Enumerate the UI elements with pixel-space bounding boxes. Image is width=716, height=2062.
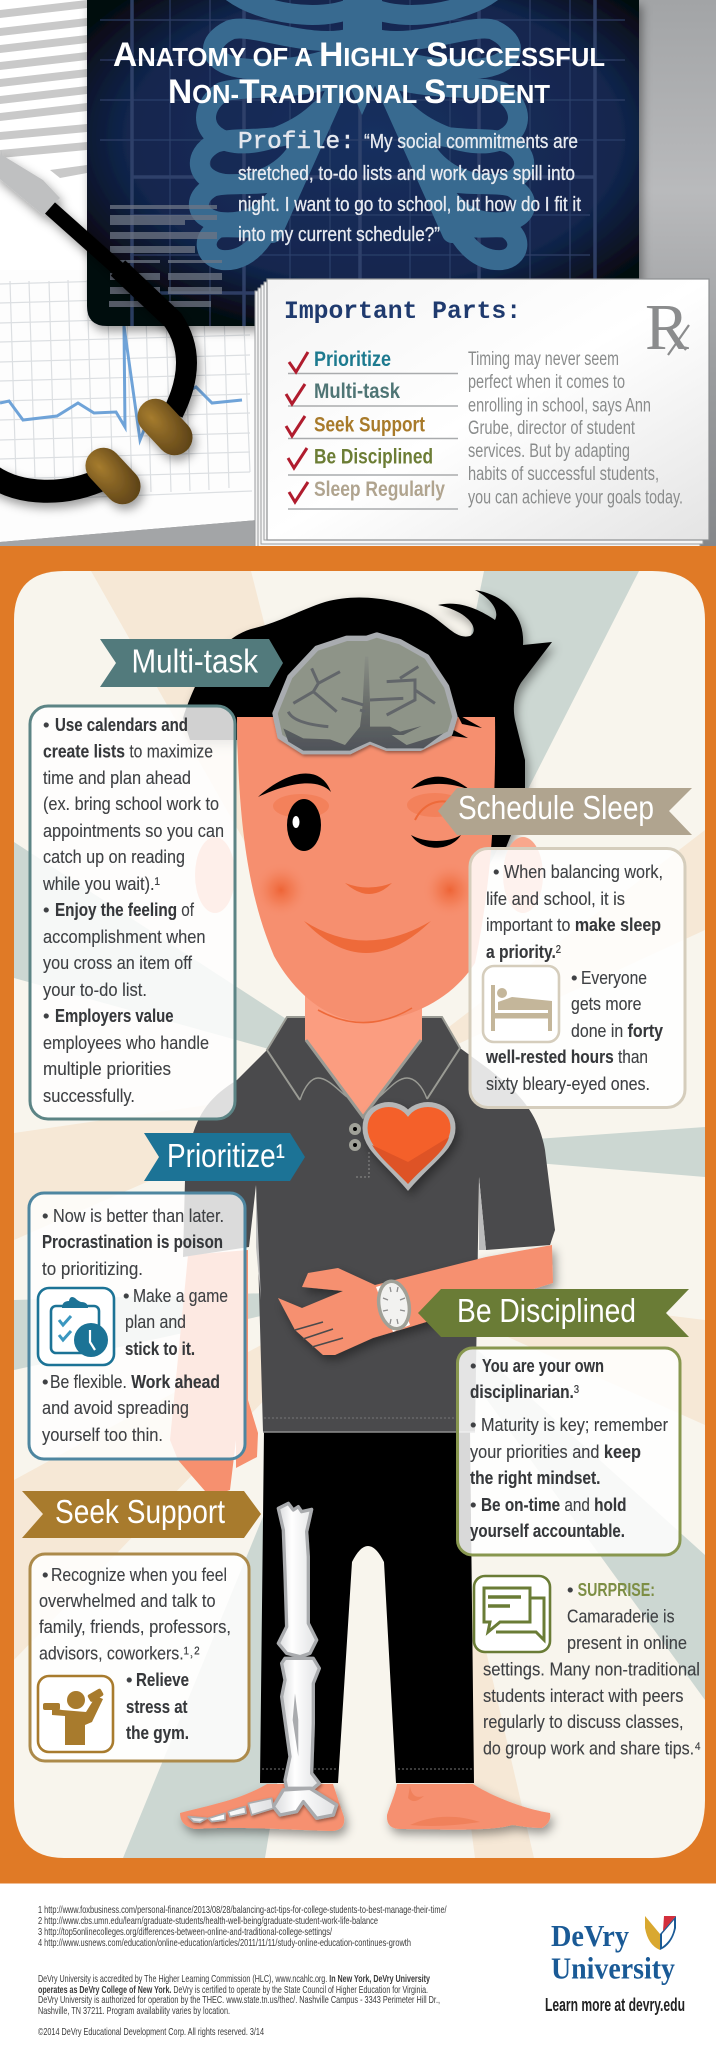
callout: discipline tips xyxy=(458,1348,680,1555)
intro paragraph xyxy=(468,349,683,509)
banner: prioritize: Prioritize¹ xyxy=(167,1137,285,1174)
accreditation statement: Nashville, TN 37211. Program availability varies by location. xyxy=(38,2005,230,2017)
heart xyxy=(365,1105,453,1187)
checklist: Prioritize xyxy=(314,348,391,371)
icon: clipboard and clock xyxy=(38,1288,114,1365)
callout: discipline tips: your priorities and keep xyxy=(470,1441,641,1462)
callout: sleep tips: a priority.² xyxy=(486,941,561,962)
profile quote: “My social commitments are xyxy=(364,131,578,153)
footnote sources: 4 http://www.usnews.com/education/online-education/articles/2011/11/11/study-online-education-continues-growth xyxy=(38,1937,411,1949)
legs and trousers xyxy=(260,1430,474,1783)
panel: important parts prescription pad xyxy=(255,279,709,553)
callout: prioritize tips: and avoid spreading xyxy=(42,1397,189,1418)
footer xyxy=(0,1884,716,2062)
callout: multi-task tips: (ex. bring school work to xyxy=(43,793,219,814)
profile quote: into my current schedule?” xyxy=(238,224,440,246)
student figure xyxy=(170,590,555,1831)
callout: discipline tips: Be on-time and hold xyxy=(481,1494,626,1515)
icon: speech bubbles xyxy=(474,1576,550,1652)
neck xyxy=(305,985,422,1117)
panel: be disciplined xyxy=(418,1289,689,1555)
callout: prioritize tips: • xyxy=(123,1285,129,1306)
callout: prioritize tips: stick to it. xyxy=(125,1338,195,1359)
nose and mouth xyxy=(345,883,392,894)
callout: discipline tips: disciplinarian.³ xyxy=(470,1381,579,1402)
callout: prioritize tips xyxy=(29,1193,245,1459)
ECG paper xyxy=(0,270,258,546)
checklist: Multi-task xyxy=(314,380,400,403)
shirt buttons xyxy=(351,1125,359,1149)
callout: sleep tips: important to make sleep xyxy=(486,914,661,935)
callout: multi-task tips: catch up on reading xyxy=(43,846,185,867)
cheeks xyxy=(253,862,309,918)
intro paragraph: Grube, director of student xyxy=(468,418,636,439)
panel: seek support xyxy=(22,1491,261,1761)
callout: support tips: Recognize when you feel xyxy=(51,1564,227,1585)
logo: DeVry University: University xyxy=(551,1950,675,1986)
profile quote xyxy=(238,129,581,246)
icon: person lifting weights xyxy=(38,1676,113,1752)
x-ray film xyxy=(87,0,639,326)
arm and hand xyxy=(278,1245,553,1355)
callout: support tips: the gym. xyxy=(126,1722,189,1743)
title: NON-TRADITIONAL STUDENT xyxy=(168,73,550,111)
banner: multi-task: Multi-task xyxy=(132,642,258,680)
panel: surprise: SURPRISE: xyxy=(578,1579,655,1600)
callout: prioritize tips: Procrastination is poison xyxy=(42,1231,223,1252)
panel: surprise: • xyxy=(567,1579,573,1600)
panel: surprise: students interact with peers xyxy=(483,1685,684,1706)
callout: multi-task tips: Enjoy the feeling of xyxy=(55,899,195,920)
footnote sources: 1 http://www.foxbusiness.com/personal-finance/2013/08/28/balancing-act-tips-for-college-students-to-best-manage-their-time/ xyxy=(38,1904,447,1916)
callout: multi-task tips: time and plan ahead xyxy=(43,767,191,788)
callout: support tips: stress at xyxy=(126,1696,188,1717)
callout: multi-task tips xyxy=(30,706,235,1119)
footnote sources: 2 http://www.cbs.umn.edu/learn/graduate-students/health-well-being/graduate-student-work-life-balance xyxy=(38,1915,378,1927)
callout: multi-task tips: • xyxy=(43,899,49,920)
callout: prioritize tips: to prioritizing. xyxy=(42,1258,143,1279)
callout: discipline tips: • xyxy=(470,1355,476,1376)
brain xyxy=(275,635,455,752)
title xyxy=(113,36,605,111)
callout: discipline tips: the right mindset. xyxy=(470,1467,600,1488)
icon: Rx symbol: R xyxy=(645,291,689,364)
intro paragraph: perfect when it comes to xyxy=(468,372,625,393)
callout: sleep tips: Everyone xyxy=(581,967,647,988)
panel: surprise: present in online xyxy=(567,1632,687,1653)
callout: sleep tips: well-rested hours than xyxy=(485,1046,648,1067)
banner: seek support xyxy=(22,1491,261,1538)
callout: multi-task tips: successfully. xyxy=(43,1085,135,1106)
callout: discipline tips: You are your own xyxy=(482,1355,604,1376)
shirt xyxy=(183,1017,555,1432)
banner: be disciplined xyxy=(418,1289,689,1337)
callout: prioritize tips: • xyxy=(42,1371,48,1392)
accreditation statement: operates as DeVry College of New York. DeVry is certified to operate by the State Council of Higher Education for Virginia. xyxy=(38,1984,428,1996)
callout: support tips: • xyxy=(42,1564,48,1585)
title: ANATOMY OF A HIGHLY SUCCESSFUL xyxy=(113,36,605,74)
banner: be disciplined: Be Disciplined xyxy=(457,1292,636,1329)
callout: multi-task tips: your to-do list. xyxy=(43,979,147,1000)
panel: surprise: Camaraderie is xyxy=(567,1606,674,1626)
callout: multi-task tips: while you wait).¹ xyxy=(42,873,160,894)
profile quote: night. I want to go to school, but how do I fit it xyxy=(238,194,581,216)
skeleton leg xyxy=(188,1503,337,1822)
panel: prioritize xyxy=(29,1133,305,1459)
earpieces xyxy=(78,391,200,512)
callout: prioritize tips: yourself too thin. xyxy=(42,1424,163,1445)
callout: support tips: • xyxy=(126,1669,132,1690)
callout: multi-task tips: you cross an item off xyxy=(43,952,193,973)
panel: schedule sleep xyxy=(438,788,692,1108)
panel background with rays xyxy=(14,571,705,1858)
callout: multi-task tips: multiple priorities xyxy=(43,1058,171,1079)
callout: support tips xyxy=(30,1554,249,1761)
accreditation statement: DeVry University is authorized for operation by the THEC. www.state.tn.us/thec/. Nashville Campus - 3343 Perimeter Hill Dr., xyxy=(38,1994,440,2006)
left arm xyxy=(170,1250,258,1491)
stethoscope xyxy=(0,150,200,512)
orange frame xyxy=(0,546,716,1884)
checklist: Seek Support xyxy=(314,414,425,436)
callout: discipline tips: Maturity is key; remember xyxy=(481,1414,668,1435)
header background xyxy=(0,0,716,546)
accreditation statement: DeVry University is accredited by The Higher Learning Commission (HLC), www.ncahlc.org. In New York, DeVry University xyxy=(38,1973,430,1985)
callout: sleep tips: • xyxy=(571,967,577,988)
ears xyxy=(195,837,543,913)
profile quote: stretched, to-do lists and work days spill into xyxy=(238,163,575,185)
accreditation statement xyxy=(38,1973,440,2038)
icon: bed xyxy=(483,966,559,1042)
banner: schedule sleep: Schedule Sleep xyxy=(458,789,654,826)
callout: sleep tips xyxy=(470,848,685,1108)
callout: multi-task tips: Use calendars and xyxy=(55,714,188,735)
intro paragraph: enrolling in school, says Ann xyxy=(468,396,651,416)
heading: important parts: Important Parts: xyxy=(284,298,521,326)
checklist xyxy=(286,348,458,509)
panel: surprise: regularly to discuss classes, xyxy=(483,1711,684,1732)
callout: sleep tips: done in forty xyxy=(571,1020,664,1041)
callout: multi-task tips: accomplishment when xyxy=(43,926,206,947)
wristwatch xyxy=(375,1279,413,1332)
callout: multi-task tips: Employers value xyxy=(55,1005,174,1026)
callout: discipline tips: • xyxy=(470,1494,476,1515)
callout: support tips: overwhelmed and talk to xyxy=(39,1590,216,1611)
callout: multi-task tips: • xyxy=(43,714,49,735)
callout: discipline tips: • xyxy=(470,1414,476,1435)
callout: multi-task tips: employees who handle xyxy=(43,1032,209,1053)
callout: multi-task tips: appointments so you can xyxy=(43,820,224,841)
eyes and brows xyxy=(258,773,470,851)
intro paragraph: services. But by adapting xyxy=(468,441,630,462)
feet xyxy=(180,1784,550,1831)
checklist: Sleep Regularly xyxy=(314,478,445,501)
callout: support tips: Relieve xyxy=(136,1669,189,1690)
callout: sleep tips: sixty bleary-eyed ones. xyxy=(486,1073,650,1094)
callout: prioritize tips: Be flexible. Work ahead xyxy=(50,1371,220,1392)
panel: multi-task xyxy=(30,639,283,1119)
callout: discipline tips: yourself accountable. xyxy=(470,1520,625,1541)
footnote sources xyxy=(38,1904,447,1949)
callout: sleep tips: • xyxy=(493,861,499,882)
callout: support tips: family, friends, professors, xyxy=(39,1616,231,1637)
intro paragraph: habits of successful students, xyxy=(468,464,659,485)
callout: multi-task tips: create lists to maximize xyxy=(43,740,213,762)
banner: multi-task xyxy=(100,639,283,687)
banner: seek support: Seek Support xyxy=(55,1493,225,1530)
hair xyxy=(183,590,552,850)
accreditation statement: ©2014 DeVry Educational Development Corp. All rights reserved. 3/14 xyxy=(38,2026,264,2038)
callout: prioritize tips: • xyxy=(42,1205,48,1226)
callout: multi-task tips: • xyxy=(43,1005,49,1026)
intro paragraph: Timing may never seem xyxy=(468,349,619,370)
callout: support tips: advisors, coworkers.¹˒² xyxy=(39,1642,200,1664)
callout: prioritize tips: Make a game xyxy=(133,1285,228,1306)
callout: sleep tips: life and school, it is xyxy=(486,888,625,909)
callout: prioritize tips: Now is better than later. xyxy=(53,1205,224,1226)
callout: prioritize tips: plan and xyxy=(125,1311,186,1332)
logo: DeVry University xyxy=(551,1916,676,1986)
profile quote: Profile: xyxy=(238,129,355,156)
banner: prioritize xyxy=(144,1133,305,1181)
face xyxy=(237,717,495,1022)
panel: surprise xyxy=(474,1576,701,1758)
callout: sleep tips: When balancing work, xyxy=(504,861,663,882)
callout: sleep tips: gets more xyxy=(571,993,642,1014)
checklist: Be Disciplined xyxy=(314,446,433,468)
logo: DeVry University: DeVry xyxy=(551,1918,629,1953)
footnote sources: 3 http://top5onlinecolleges.org/differences-between-online-and-traditional-college-settings/ xyxy=(38,1926,332,1938)
